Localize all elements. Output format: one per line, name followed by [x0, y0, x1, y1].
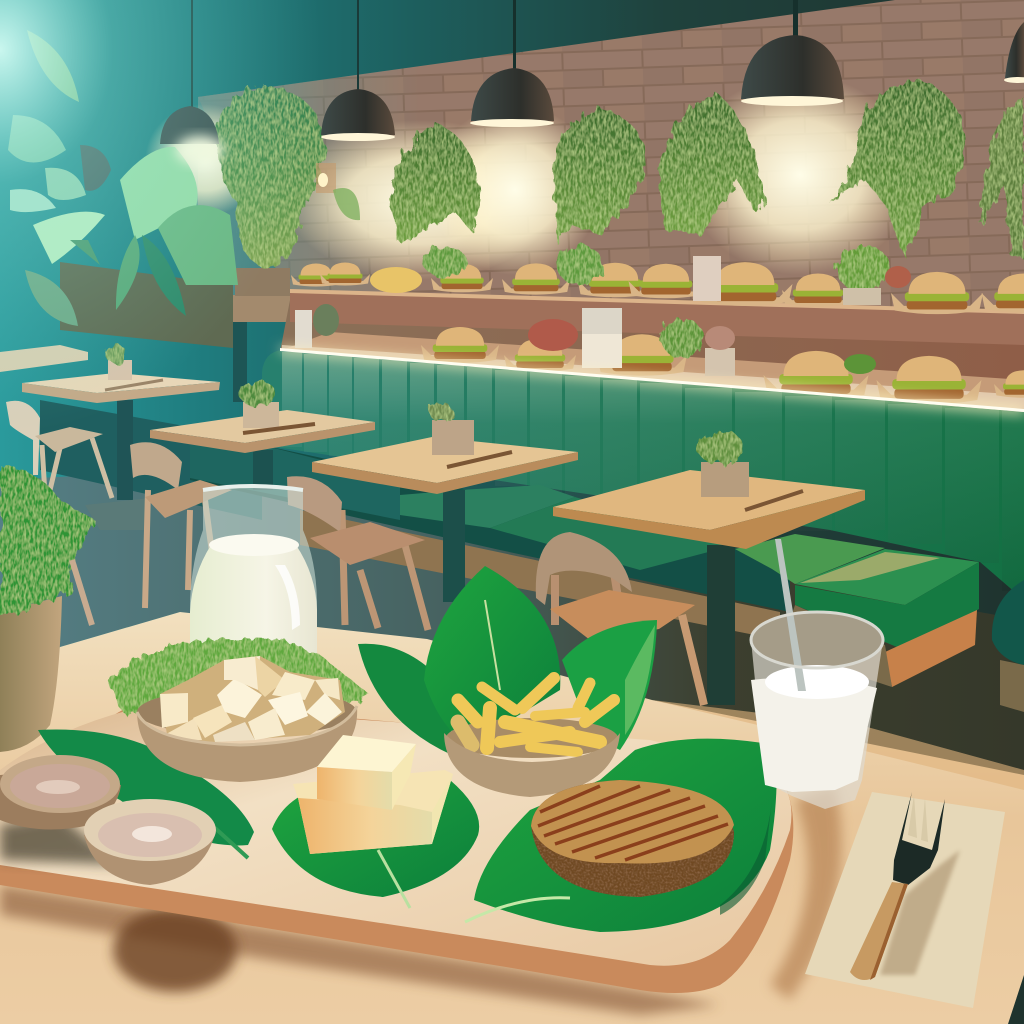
tofu bowl [137, 656, 357, 782]
hanging plant 6 [980, 98, 1024, 258]
napkin [805, 792, 1005, 1008]
left dark bench [40, 400, 262, 520]
cafe table 2 [22, 373, 220, 530]
burgers on upper shelf [291, 262, 1024, 314]
pendant lamp 5 [1004, 22, 1024, 83]
left side light haze [0, 0, 520, 620]
brick wall [145, 0, 1024, 340]
cafe table 4 [312, 437, 578, 602]
hanging plant 2 [390, 122, 480, 242]
cafe table 5 [553, 470, 865, 705]
large leafy plant left [8, 30, 238, 326]
hanging plant 4 [658, 92, 765, 235]
bench seats [190, 445, 1024, 712]
foreground table [0, 612, 1024, 1024]
sauce bowl 2 [84, 799, 216, 885]
bottom leaf under patty [465, 739, 777, 932]
left leaf under sauces [38, 730, 254, 858]
hanging plant 5 [830, 80, 965, 258]
serving board [0, 700, 793, 993]
fries bowl [444, 678, 620, 797]
fork [850, 792, 945, 980]
shelving unit [280, 289, 1024, 420]
sauce bowl 1 [0, 755, 121, 829]
chair 1 [6, 401, 112, 498]
chair 4 [536, 532, 704, 705]
wooden planter wall [60, 262, 292, 402]
veggie patty [531, 780, 734, 897]
microgreens and cups on upper shelf [423, 245, 911, 305]
pendant lamp 1 [160, 0, 224, 164]
bench base [190, 445, 790, 640]
green bench back [262, 350, 1024, 600]
small wall lantern [316, 163, 360, 220]
chair 3 [287, 476, 428, 630]
table centrepieces [105, 345, 803, 510]
leaf arrangement behind fries [358, 566, 657, 755]
pendant lamp 2 [321, 0, 395, 141]
hanging plant 1 [216, 85, 325, 268]
cheese blocks [293, 735, 453, 854]
cheese leaf [272, 780, 479, 908]
cafe table 3 [150, 410, 375, 490]
pendant lamp 3 [470, 0, 554, 127]
pendant lamp 4 [741, 0, 844, 106]
floor [0, 470, 1024, 780]
milk jar [190, 486, 317, 670]
potted plant foreground [0, 465, 95, 752]
hanging plant 3 [553, 108, 648, 245]
cafe table far left [0, 345, 88, 372]
milk glass with straw [751, 539, 883, 809]
LED light strip [280, 347, 1024, 414]
chair 2 [130, 442, 232, 608]
cups and greens on lower shelf [295, 304, 876, 376]
burgers on lower shelf [421, 327, 1024, 404]
lettuce [108, 638, 370, 715]
